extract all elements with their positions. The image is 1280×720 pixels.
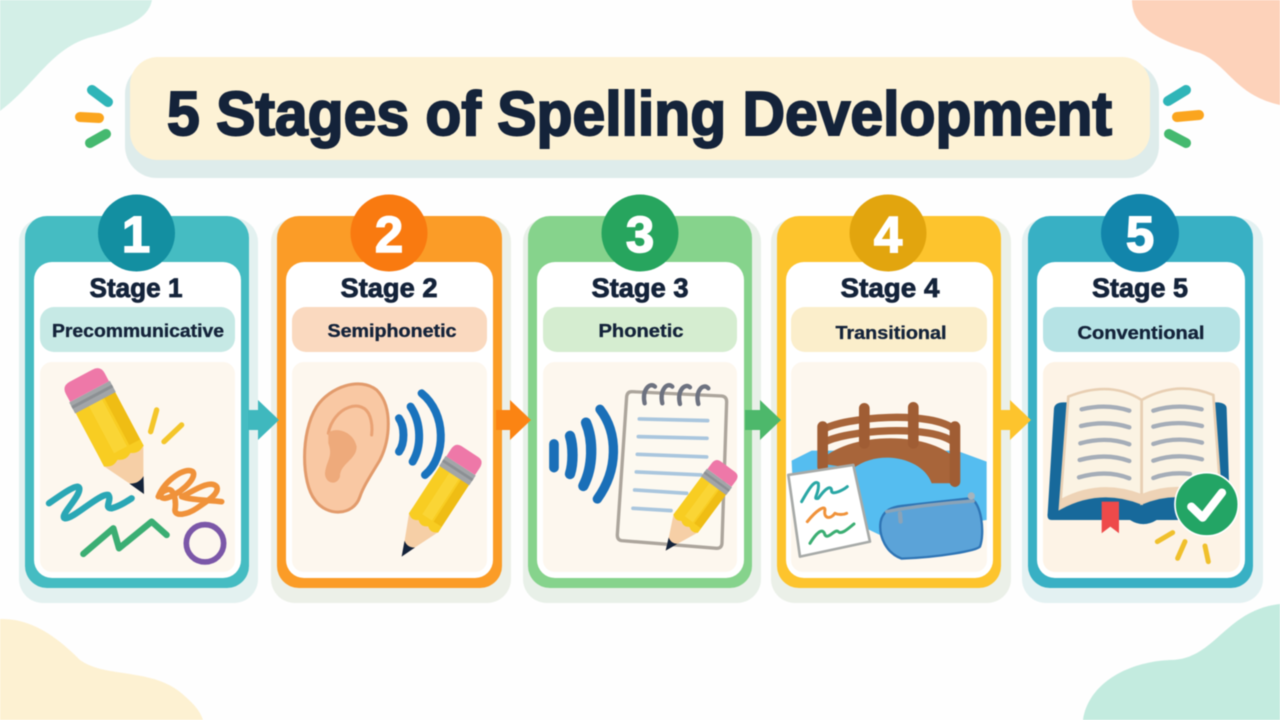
heading: stage 3: Stage 3 <box>592 273 688 303</box>
arrow: stage 4 to 5 <box>1000 400 1031 440</box>
number badge 2 <box>350 194 428 272</box>
heading: stage 5: Stage 5 <box>1092 273 1188 303</box>
number badge 2: 2 <box>375 206 403 263</box>
heading: stage 2: Stage 2 <box>340 273 438 303</box>
arrow: stage 3 to 4 <box>745 400 781 440</box>
decorative blob: bottom left <box>0 619 203 720</box>
label pill: Conventional <box>1043 307 1240 352</box>
number badge 4: 4 <box>874 206 903 263</box>
panel: stage 3 <box>523 194 761 603</box>
label pill: Precommunicative: Precommunicative <box>52 320 224 341</box>
icon: open book with check mark <box>1047 389 1238 562</box>
label pill: Semiphonetic <box>292 307 487 352</box>
icon: sound waves, notepad and pencil <box>554 385 740 560</box>
label pill: Transitional: Transitional <box>836 322 946 343</box>
title banner <box>125 57 1159 178</box>
title text: 5 Stages of Spelling Development <box>167 80 1112 149</box>
panel: stage 4 <box>771 194 1011 603</box>
icon: left sparkle <box>80 90 108 143</box>
decorative blob: top left <box>0 0 152 111</box>
number badge 5 <box>1101 194 1179 272</box>
label pill: Transitional <box>791 307 987 352</box>
panel: stage 2 <box>271 194 511 603</box>
icon: pencil and scribbles <box>49 365 224 562</box>
label pill: Precommunicative <box>40 307 235 352</box>
decorative blob: top right <box>1132 0 1280 105</box>
number badge 1 <box>98 194 175 272</box>
label pill: Phonetic <box>543 307 737 352</box>
arrow: stage 2 to 3 <box>496 400 531 440</box>
number badge 1: 1 <box>122 206 150 263</box>
number badge 3: 3 <box>626 206 654 263</box>
label pill: Conventional: Conventional <box>1078 322 1204 343</box>
label pill: Phonetic: Phonetic <box>598 320 684 341</box>
heading: stage 1: Stage 1 <box>90 273 182 303</box>
icon: ear, sound waves and pencil <box>305 384 485 566</box>
arrow: stage 1 to 2 <box>248 400 279 440</box>
number badge 3 <box>602 194 678 272</box>
icon: right sparkle <box>1168 90 1199 143</box>
icon: bridge, water, paper and pencil case <box>788 407 987 559</box>
decorative blob: bottom right <box>1083 604 1280 720</box>
panel: stage 5 <box>1022 194 1263 603</box>
number badge 5: 5 <box>1126 206 1154 263</box>
number badge 4 <box>850 194 926 272</box>
heading: stage 4: Stage 4 <box>840 273 940 303</box>
label pill: Semiphonetic: Semiphonetic <box>328 320 456 341</box>
panel: stage 1 <box>19 194 258 603</box>
